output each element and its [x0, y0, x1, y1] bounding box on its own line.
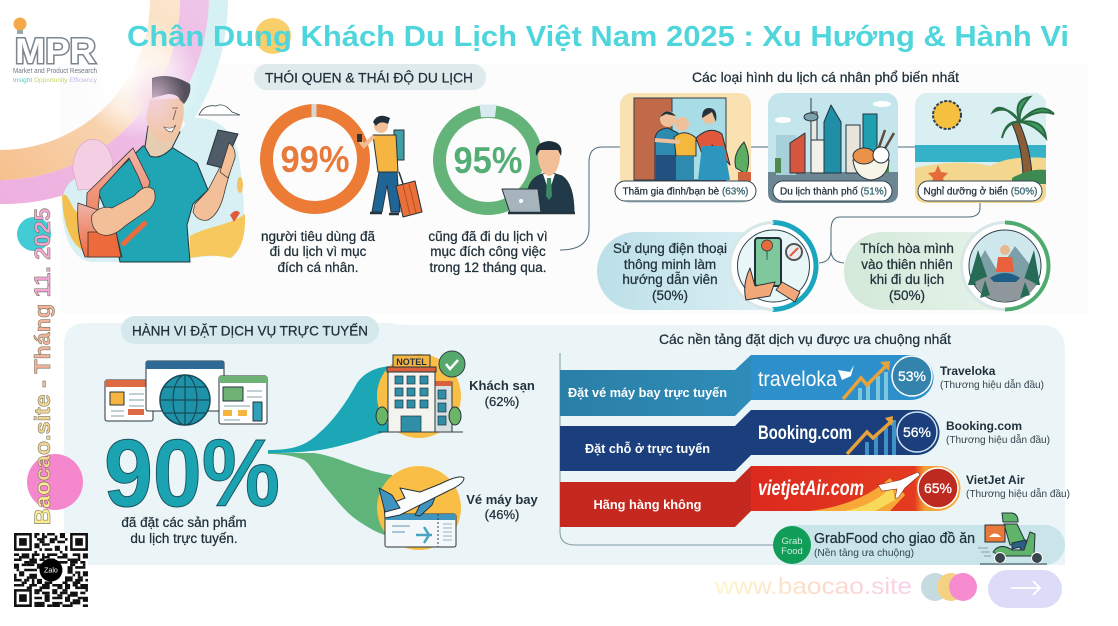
QR code: Zalo: [44, 567, 58, 575]
heading: travel habits: THÓI QUEN & THÁI ĐỘ DU LỊCH: [265, 70, 473, 86]
bar: Booking.com: (Thương hiệu dẫn đầu): [946, 433, 1050, 446]
callout: smartphone as guide: (50%): [652, 288, 688, 303]
callout: nature immersion: khi đi du lịch: [870, 272, 944, 287]
bar: Booking.com: [560, 410, 1050, 471]
caption: booked online: du lịch trực tuyến.: [130, 531, 238, 546]
icon: delivery scooter: [978, 513, 1047, 564]
bar: Booking.com: Đặt chỗ ở trực tuyến: [585, 441, 710, 456]
card: beach holiday: Nghỉ dưỡng ở biển (50%): [924, 186, 1038, 198]
big number: 90%: 90%: [104, 420, 280, 527]
donut chart: 95%: [440, 104, 536, 208]
heading: travel habits: [254, 64, 486, 90]
bar: Booking.com: 56%: [903, 424, 931, 440]
card: visiting family and friends: Thăm gia đình/bạn bè (63%): [622, 186, 748, 198]
icon: hotel: [376, 351, 465, 438]
callout: GrabFood: GrabFood cho giao đồ ăn: [814, 530, 975, 547]
logo: MPR: MPR: [15, 32, 96, 71]
donut chart: 99%: [266, 104, 364, 208]
bar: Booking.com: Booking.com: [758, 423, 852, 444]
caption: business travel: mục đích công việc: [430, 244, 546, 259]
label: hotel 62%: [469, 378, 535, 409]
bar: VietJet Air: Hãng hàng không: [594, 497, 702, 512]
frame line around platforms: [560, 353, 780, 545]
icon: tourist with suitcase: [357, 116, 422, 217]
connector lines: [560, 147, 980, 263]
caption: leisure travel: [261, 229, 375, 275]
label: hotel 62%: Khách sạn: [469, 378, 535, 393]
card: visiting family and friends: [615, 93, 756, 203]
caption: booked online: đã đặt các sản phẩm: [121, 515, 247, 530]
icon: businessman with laptop: [502, 141, 575, 213]
label: flights 46%: Vé máy bay: [466, 492, 539, 507]
decorative yellow circle behind title: [255, 18, 291, 54]
callout: GrabFood: Food: [781, 546, 803, 557]
bar: VietJet Air: vietjetAir.com: [758, 477, 864, 500]
donut chart: 95%: 95%: [454, 140, 522, 181]
heading: online booking behaviour: HÀNH VI ĐẶT DỊCH VỤ TRỰC TUYẾN: [132, 322, 368, 338]
callout: GrabFood: (Nền tảng ưa chuộng): [814, 547, 914, 559]
flow: split to hotel and flights: [268, 366, 392, 537]
card: city travel: Du lịch thành phố (51%): [780, 186, 887, 198]
label: hotel 62%: (62%): [485, 394, 519, 409]
bar: Traveloka: [560, 355, 1044, 416]
card: city travel: [768, 93, 898, 203]
side label: Baocao.site - Tháng 11. 2025: [30, 208, 55, 525]
next arrow button: [988, 570, 1062, 608]
callout: GrabFood: [773, 513, 1065, 565]
title: Chân Dung Khách Du Lịch Việt Nam 2025 : Xu Hướng & Hành Vi: [127, 21, 1069, 53]
bar: Traveloka: 53%: [898, 368, 926, 384]
caption: leisure travel: đi du lịch vì mục: [270, 244, 367, 259]
callout: nature immersion: (50%): [889, 288, 925, 303]
caption: booked online: [121, 515, 247, 546]
bar: Booking.com: Booking.com: [946, 419, 1022, 433]
caption: leisure travel: người tiêu dùng đã: [261, 229, 375, 244]
logo: MPR: [13, 18, 98, 84]
QR code: [14, 533, 88, 607]
donut chart: 99%: 99%: [280, 139, 350, 180]
label: flights 46%: (46%): [485, 507, 519, 522]
heading: online booking behaviour: [121, 316, 379, 344]
decorative dots: [921, 573, 977, 601]
heading: popular leisure types: Các loại hình du lịch cá nhân phổ biến nhất: [692, 69, 959, 85]
callout: nature immersion: [844, 222, 1048, 310]
logo: MPR: Insight Opportunity Efficiency: [13, 77, 98, 84]
icon: hotel: NOTEL: [396, 357, 427, 367]
bar: VietJet Air: (Thương hiệu dẫn đầu): [966, 487, 1070, 500]
bar: Traveloka: Đặt vé máy bay trực tuyến: [568, 385, 727, 400]
bar: Traveloka: (Thương hiệu dẫn đầu): [940, 378, 1044, 391]
callout: smartphone as guide: [597, 222, 817, 310]
callout: smartphone as guide: thông minh làm: [624, 257, 716, 272]
icon: browser windows and globe: [105, 361, 267, 425]
caption: business travel: [428, 229, 548, 275]
bar: VietJet Air: [560, 466, 1070, 527]
decorative side circle: cyan: [17, 217, 51, 251]
callout: GrabFood: Grab: [781, 536, 803, 547]
caption: leisure travel: đích cá nhân.: [277, 260, 359, 275]
icon: plane and ticket: [377, 466, 464, 550]
panel: lower section background: [64, 323, 1065, 565]
heading: preferred booking platforms: Các nền tảng đặt dịch vụ được ưa chuộng nhất: [659, 331, 951, 347]
callout: smartphone as guide: hướng dẫn viên: [622, 272, 718, 287]
bar: Traveloka: traveloka: [758, 368, 837, 391]
callout: nature immersion: Thích hòa mình: [860, 241, 954, 256]
website url: www.baocao.site: [714, 573, 912, 599]
logo: MPR: Market and Product Research: [13, 66, 97, 75]
card: beach holiday: [915, 93, 1054, 203]
illustration: traveller with phone: [62, 76, 245, 262]
panel: upper section background: [60, 64, 1088, 314]
callout: nature immersion: vào thiên nhiên: [861, 257, 953, 272]
bar: Traveloka: Traveloka: [940, 364, 996, 378]
decorative side circle: pink: [27, 454, 83, 510]
label: flights 46%: [466, 492, 539, 522]
bar: VietJet Air: VietJet Air: [966, 473, 1025, 487]
bar: VietJet Air: 65%: [924, 480, 952, 496]
caption: business travel: trong 12 tháng qua.: [429, 260, 547, 275]
callout: smartphone as guide: Sử dụng điện thoại: [613, 241, 727, 256]
caption: business travel: cũng đã đi du lịch vì: [428, 229, 548, 244]
